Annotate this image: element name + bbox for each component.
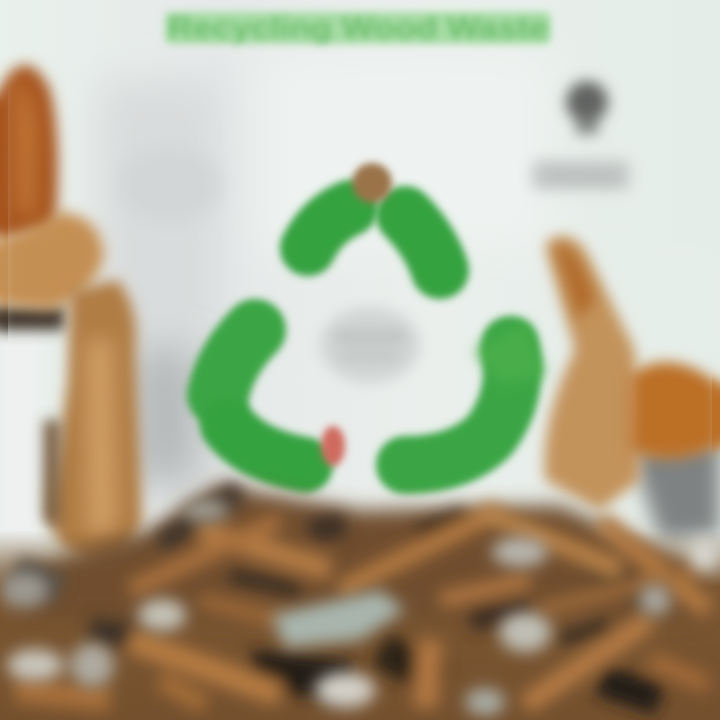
arrow: bottom left — [228, 425, 305, 465]
brown knot — [352, 163, 392, 203]
wooden objects: right — [544, 236, 720, 540]
wooden objects: left — [0, 65, 142, 560]
logo caption: Recycling — [549, 168, 615, 185]
centre label — [320, 307, 420, 383]
arrow: left — [218, 330, 255, 395]
red tip — [321, 426, 345, 466]
wood debris pile — [0, 485, 720, 720]
arrow: right — [405, 345, 512, 465]
arrow: top right — [405, 215, 440, 270]
arrow: top left — [308, 208, 350, 248]
title: Recycling Wood Waste — [168, 10, 548, 45]
faint left label — [118, 147, 222, 223]
recycling symbol — [218, 163, 545, 466]
logo caption — [532, 160, 630, 190]
logo icon: top right — [566, 81, 608, 134]
arrow tip highlight — [475, 322, 545, 385]
